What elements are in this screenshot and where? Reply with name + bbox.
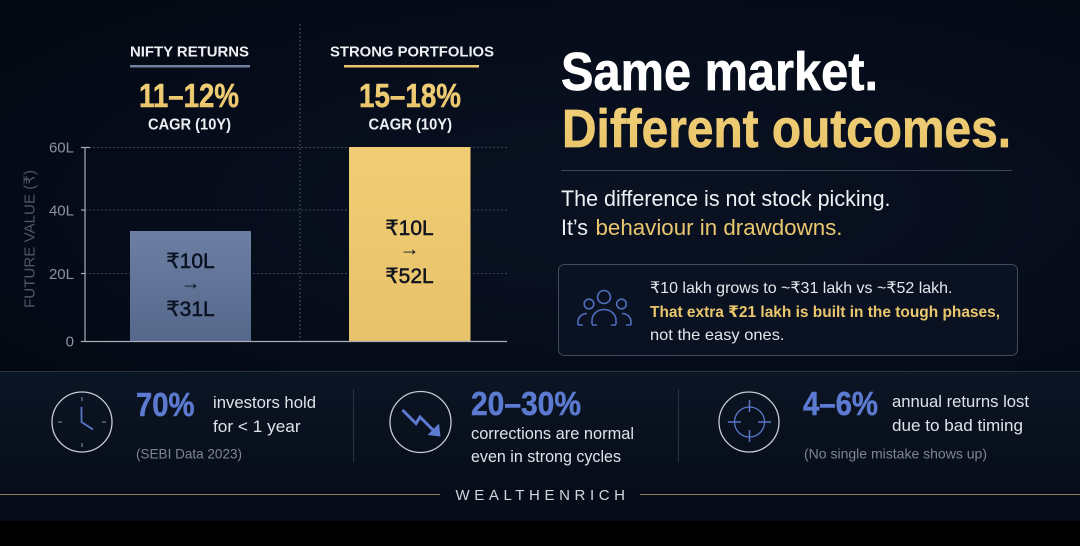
subheading — [561, 186, 890, 240]
stat: bad timing: (No single mistake shows up) — [804, 446, 987, 462]
icon: people group — [578, 290, 631, 325]
subheading: The difference is not stock picking. — [561, 186, 890, 211]
bar: Nifty: ₹31L — [166, 298, 215, 321]
stat: Nifty CAGR: 11–12% — [139, 77, 239, 114]
subheading: behaviour in drawdowns. — [596, 215, 842, 240]
y axis label: FUTURE VALUE (₹) — [22, 170, 38, 308]
callout text: ₹10 lakh grows to ~₹31 lakh vs ~₹52 lakh. — [650, 280, 952, 297]
stat: corrections: 20–30% — [471, 385, 581, 422]
bar: Nifty: ₹10L — [166, 250, 215, 273]
stat: holding period: for < 1 year — [213, 417, 301, 436]
y axis tick labels: 40L — [49, 202, 74, 220]
title — [561, 42, 1011, 159]
stat: bad timing — [719, 385, 1029, 462]
stat: Nifty CAGR — [139, 77, 239, 134]
stat: holding period: investors hold — [213, 393, 316, 412]
stat: strong portfolios CAGR — [359, 77, 461, 134]
callout text: That extra ₹21 lakh is built in the tough phases, — [650, 304, 1000, 321]
subheading: It’s — [561, 215, 588, 240]
title: Different outcomes. — [562, 99, 1011, 159]
bar: strong portfolios: ₹52L — [385, 265, 434, 288]
bar: Nifty — [130, 231, 251, 341]
footer brand: WEALTHENRICH — [456, 487, 625, 504]
stat: corrections: even in strong cycles — [471, 447, 621, 466]
stat: Nifty CAGR: CAGR (10Y) — [148, 116, 231, 134]
panel: bottom stats band — [0, 371, 1080, 521]
callout text — [650, 280, 1000, 344]
stat: bad timing: annual returns lost — [892, 392, 1029, 411]
bar: strong portfolios: ₹10L — [385, 217, 434, 240]
panel: bar chart comparison — [22, 24, 507, 350]
y axis tick labels: 20L — [49, 266, 74, 283]
title: Same market. — [561, 42, 878, 102]
chart axes — [81, 147, 507, 342]
heading: Nifty returns: NIFTY RETURNS — [130, 44, 249, 60]
stat: holding period: (SEBI Data 2023) — [136, 446, 242, 462]
y axis tick labels — [49, 140, 74, 350]
icon: target crosshair — [719, 392, 779, 452]
stat: bad timing: due to bad timing — [892, 416, 1023, 435]
icon: clock — [52, 392, 112, 452]
stat: holding period — [52, 386, 316, 462]
callout text: not the easy ones. — [650, 327, 784, 344]
y axis tick labels: 60L — [49, 140, 74, 156]
stat: strong portfolios CAGR: CAGR (10Y) — [368, 116, 452, 134]
bar: Nifty: → — [180, 272, 200, 294]
stat: corrections — [390, 385, 634, 466]
stat: corrections: corrections are normal — [471, 424, 634, 443]
grid lines — [85, 24, 507, 341]
stat: strong portfolios CAGR: 15–18% — [359, 77, 461, 114]
icon: falling arrow — [390, 392, 451, 452]
bar: strong portfolios: → — [400, 238, 420, 260]
y axis tick labels: 0 — [66, 334, 74, 350]
callout box — [558, 264, 1018, 356]
heading: Strong portfolios: STRONG PORTFOLIOS — [330, 44, 494, 60]
stat: holding period: 70% — [136, 386, 194, 423]
stat: bad timing: 4–6% — [803, 385, 878, 422]
bar: strong portfolios — [349, 147, 470, 341]
